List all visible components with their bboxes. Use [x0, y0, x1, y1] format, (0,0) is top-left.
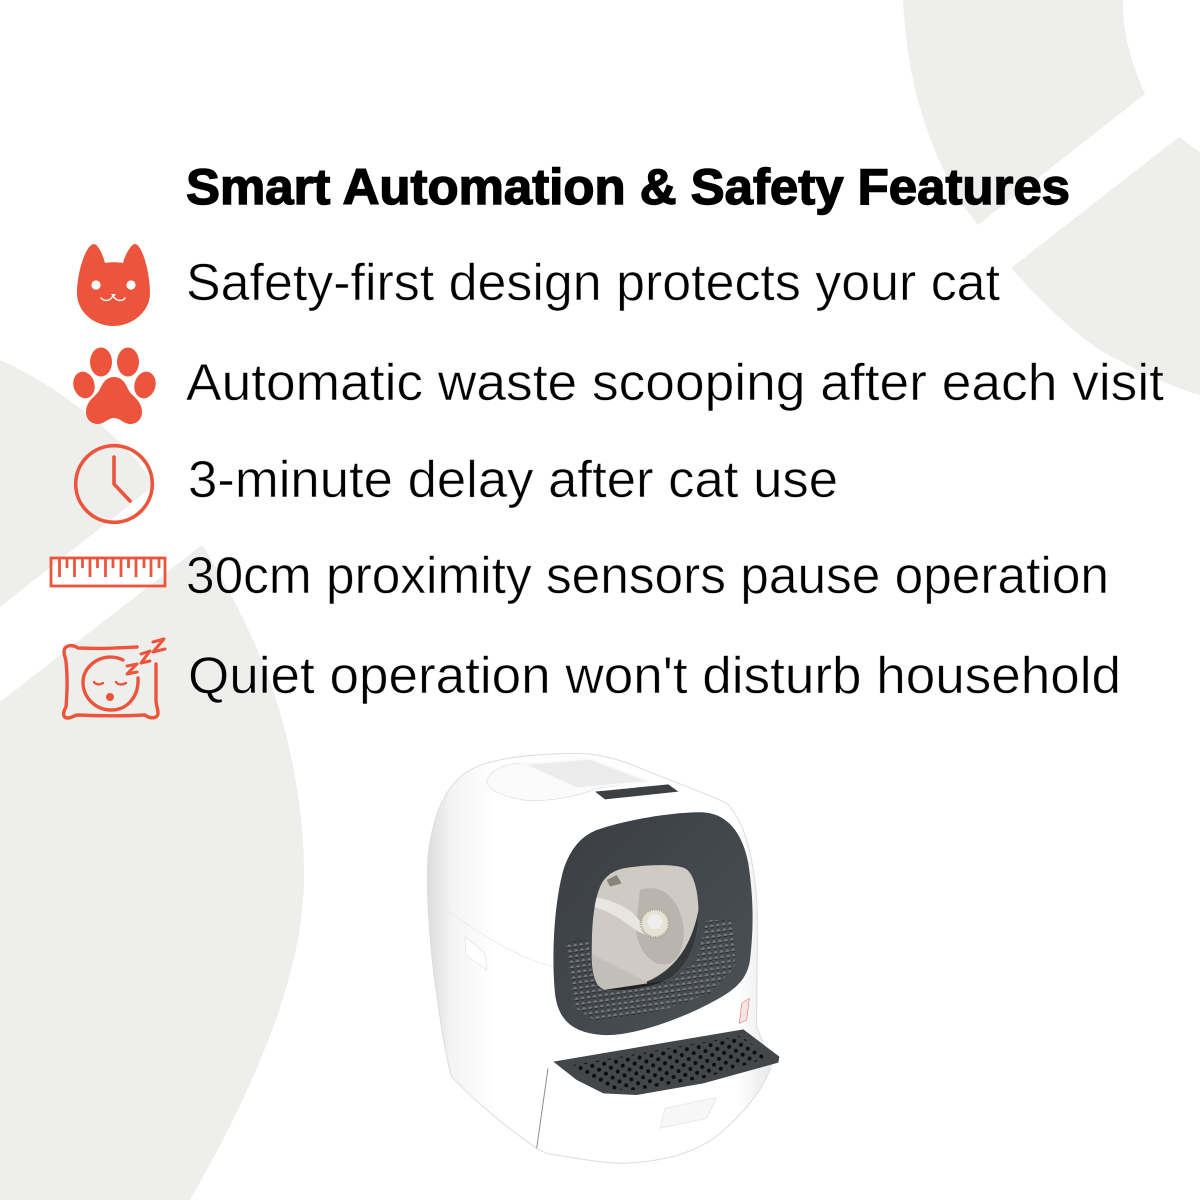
entrance frame: [553, 812, 753, 1035]
feature text: safety-first: Safety-first design protects your cat: [186, 254, 1001, 312]
feature text: automatic scooping: Automatic waste scooping after each visit: [186, 354, 1165, 412]
textured frame ramp: [565, 920, 735, 1022]
background shape: top right arc upper: [903, 0, 1145, 225]
feature text: quiet operation: Quiet operation won't disturb household: [188, 647, 1121, 705]
background shape: top right arc lower: [1011, 137, 1200, 395]
perforated tray: [553, 1029, 779, 1095]
warning label: [739, 998, 749, 1023]
icon: ruler: [51, 558, 165, 586]
feature text: proximity sensors: 30cm proximity sensors pause operation: [186, 547, 1109, 605]
icon: paw: [70, 348, 159, 424]
entrance opening and interior: [592, 865, 698, 990]
icon: sleeping pillow: [64, 639, 165, 718]
drawer line and handle: [537, 1068, 717, 1148]
icon: clock: [76, 446, 152, 522]
body seam and side handle: [428, 897, 553, 970]
product: automatic litter box: [427, 753, 779, 1163]
feature text: 3-minute delay: 3-minute delay after cat use: [188, 451, 838, 509]
control panel: [595, 784, 678, 799]
background shape: left circle upper: [0, 360, 155, 607]
top lid and clear window: [487, 758, 650, 801]
background shape: left circle lower: [0, 545, 304, 1200]
title: Smart Automation & Safety Features: [186, 159, 1070, 215]
litter box body: [427, 753, 772, 1163]
icon: cat face: [77, 244, 150, 326]
